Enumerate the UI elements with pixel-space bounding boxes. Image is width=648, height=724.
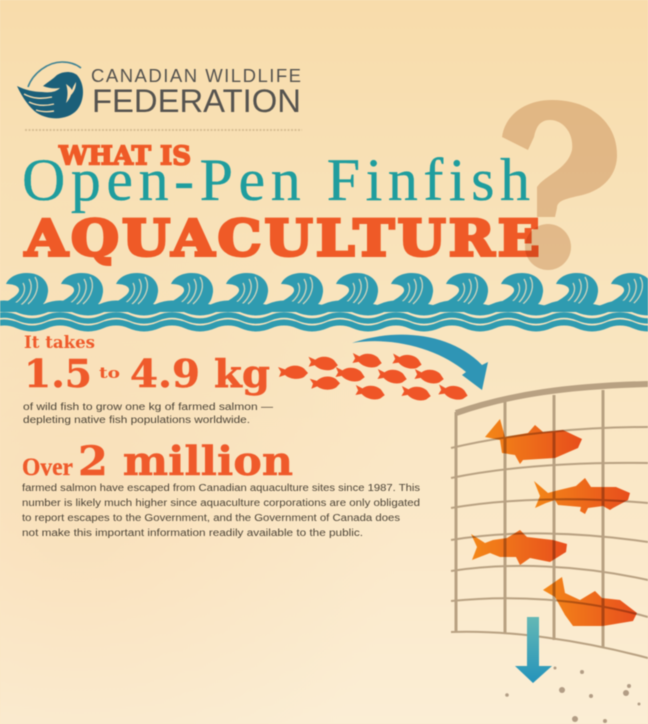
falling waste particles [505,666,640,723]
arrow: curved blue [352,335,488,390]
text block: escapes: number is likely much higher since aquaculture corporations are only obligated [22,498,420,509]
fish net [451,384,648,658]
logo text line 2: FEDERATION [92,83,301,119]
text block: wild fish: depleting native fish populations worldwide. [23,415,250,426]
waves band [0,273,648,328]
text block: wild fish: of wild fish to grow one kg of farmed salmon — [23,402,273,413]
text block: escapes: to report escapes to the Government, and the Government of Canada does [22,513,400,524]
stat: 1.5 to 4.9 kg [24,333,270,396]
stat word: to: to [99,364,120,382]
text block: escapes: not make this important information readily available to the public. [22,528,363,539]
stat number: 4.9 kg: 4.9 kg [130,351,270,396]
fish 2 [534,478,630,514]
stat number: 1.5: 1.5 [24,351,92,396]
logo text line 1: CANADIAN WILDLIFE [91,65,301,86]
stat lead: Over: Over [22,454,73,481]
icon: loon emblem [17,62,83,118]
title: What is: WHAT IS [58,142,191,172]
icon: school of small fish [278,352,469,402]
title: Open-Pen Finfish: Open-Pen Finfish [22,147,530,213]
logo: Canadian Wildlife Federation [17,62,301,119]
stat lead: It takes: It takes [24,333,95,352]
text block: wild fish [23,402,273,426]
salmon in net [471,419,637,626]
fish 3 [471,530,567,565]
fish 4 [543,577,637,626]
stat number: 2 million: 2 million [78,438,293,485]
fish 1 [485,419,582,464]
icon: question mark [502,100,617,270]
text block: escapes: farmed salmon have escaped from Canadian aquaculture sites since 1987. This [22,483,420,494]
stat: over 2 million [22,438,293,485]
arrow: downward blue [515,617,552,683]
text block: escapes [22,483,420,539]
title: Aquaculture: AQUACULTURE [24,208,543,268]
